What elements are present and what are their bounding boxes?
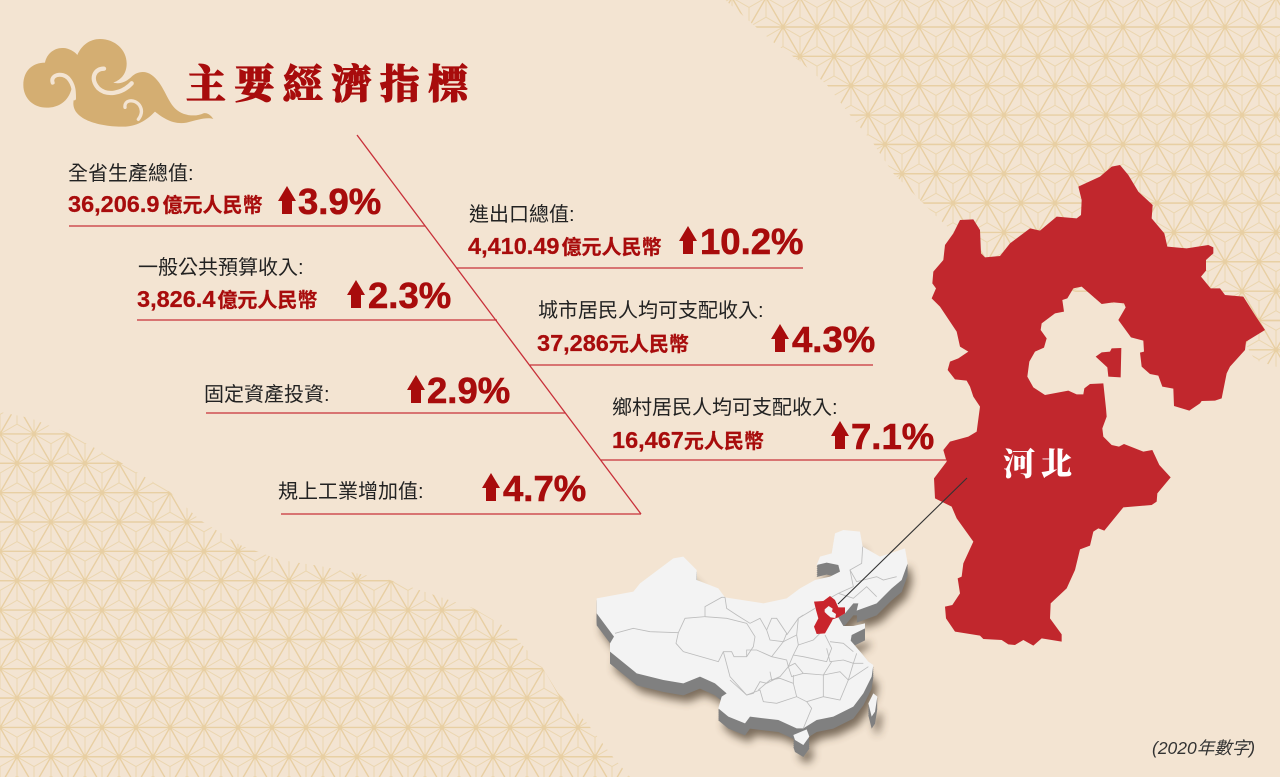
rule [206, 412, 565, 414]
rule [69, 225, 425, 227]
rule [530, 364, 873, 366]
map top face [597, 530, 908, 745]
province borders [615, 547, 897, 728]
percent: 2.9% [427, 370, 510, 411]
label: 規上工業增加值: [278, 480, 424, 503]
Beijing Tianjin gap [825, 606, 836, 618]
footnote: (2020年數字) [1152, 738, 1255, 758]
map shadow [601, 549, 912, 764]
icon: up arrow [482, 473, 500, 501]
metric: urban income [530, 299, 875, 365]
diagonal divider line [357, 135, 641, 514]
label: 一般公共預算收入: [138, 256, 304, 279]
percent: 7.1% [851, 416, 934, 457]
icon: up arrow [831, 421, 849, 449]
percent: 3.9% [298, 181, 381, 222]
Hebei highlight [814, 596, 845, 634]
icon: up arrow [407, 375, 425, 403]
label: 城市居民人均可支配收入: [538, 299, 764, 322]
map label: Hebei: 河北 [1003, 446, 1077, 482]
metric: import export [456, 203, 804, 268]
rule [137, 319, 497, 321]
label: 固定資產投資: [204, 383, 330, 406]
pattern: top right asanoha [725, 0, 1280, 368]
percent: 10.2% [700, 221, 804, 262]
icon: up arrow [771, 324, 789, 352]
icon: up arrow [347, 280, 365, 308]
percent: 4.3% [792, 319, 875, 360]
rule [456, 267, 803, 269]
label: 鄉村居民人均可支配收入: [612, 396, 838, 419]
rule [601, 459, 946, 461]
percent: 4.7% [503, 468, 586, 509]
map extrusion [597, 532, 908, 757]
metric: public budget revenue [137, 256, 497, 320]
icon: up arrow [679, 226, 697, 254]
title: 主要經濟指標 [186, 62, 476, 107]
percent: 2.3% [368, 275, 451, 316]
metric: fixed asset investment [204, 370, 565, 413]
rule [281, 513, 641, 515]
connector line [838, 478, 967, 604]
pattern: bottom left asanoha [0, 412, 630, 777]
value: 16,467元人民幣 [612, 427, 764, 453]
icon: gold auspicious cloud [23, 39, 213, 127]
label: 全省生產總值: [68, 162, 194, 185]
map: Hebei province [932, 165, 1265, 646]
value: 4,410.49億元人民幣 [468, 233, 661, 259]
value: 3,826.4億元人民幣 [137, 286, 317, 312]
icon: up arrow [278, 186, 296, 214]
value: 36,206.9億元人民幣 [68, 191, 262, 217]
value: 37,286元人民幣 [537, 330, 689, 356]
metric: rural income [601, 396, 946, 460]
label: 進出口總值: [469, 203, 575, 226]
metric: GDP [68, 162, 425, 226]
map: China 3D with Hebei highlighted [597, 530, 912, 764]
metric: industrial value added [278, 468, 641, 514]
